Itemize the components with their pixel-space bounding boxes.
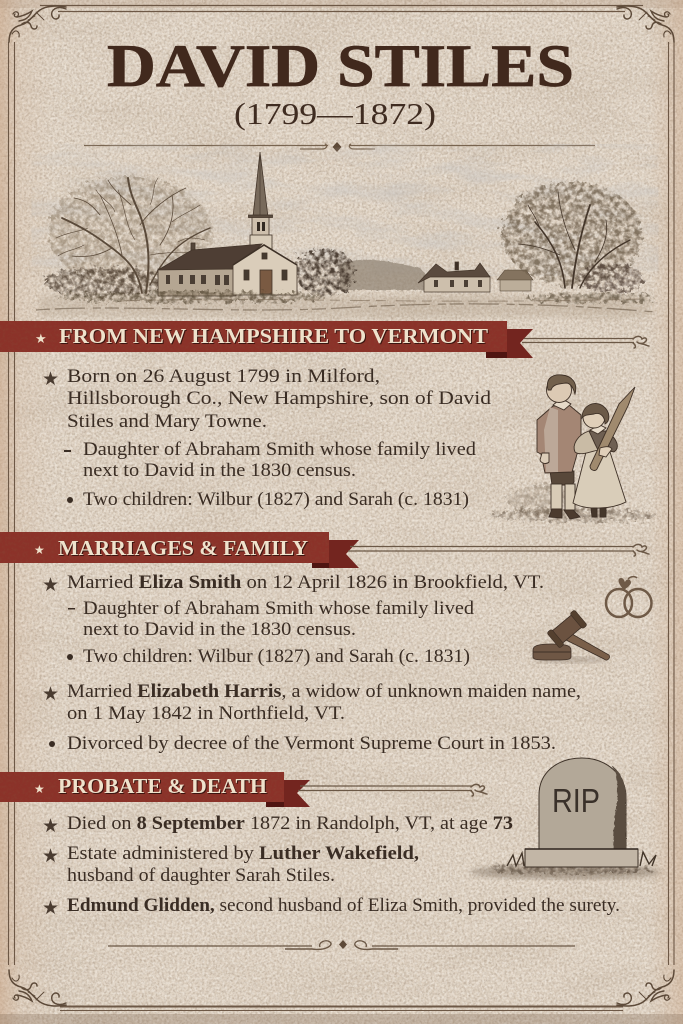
text block: first marriage: Daughter of Abraham Smith whose family lived xyxy=(83,598,475,619)
dash bullet xyxy=(64,450,71,452)
icon: wedding rings xyxy=(606,577,652,617)
corner ornament: top right xyxy=(617,6,674,42)
banner heading: MARRIAGES & FAMILY xyxy=(59,537,309,561)
banner star: ★ xyxy=(35,332,47,347)
text block: first marriage xyxy=(42,572,544,667)
text block: first marriage: next to David in the 1830 census. xyxy=(83,619,356,640)
text block: birth: next to David in the 1830 census. xyxy=(83,460,356,481)
dot bullet xyxy=(67,654,73,660)
ground xyxy=(490,508,660,522)
illustration: village landscape xyxy=(36,150,655,317)
nave windows xyxy=(166,275,229,285)
belfry xyxy=(252,217,269,237)
illustration: two children xyxy=(490,375,660,522)
corner ornament: bottom left xyxy=(9,970,66,1006)
star bullet: ★ xyxy=(42,368,59,390)
dot bullet xyxy=(49,741,55,747)
banner: from New Hampshire to Vermont xyxy=(0,321,533,358)
dash bullet xyxy=(68,608,75,610)
banner heading: FROM NEW HAMPSHIRE TO VERMONT xyxy=(60,325,489,349)
text block: death and estate: Died on 8 September 1872 in Randolph, VT, at age 73 xyxy=(67,813,513,834)
nave wall xyxy=(158,269,236,296)
icon: gavel xyxy=(532,610,610,663)
banner heading: PROBATE & DEATH xyxy=(58,774,267,798)
chimney xyxy=(191,243,195,252)
bottom divider xyxy=(108,940,575,949)
banner heading: MARRIAGES & FAMILY xyxy=(58,536,308,560)
illustration: RIP tombstone xyxy=(470,758,660,879)
star bullet: ★ xyxy=(42,683,59,705)
girl xyxy=(573,403,626,517)
text block: death and estate: Estate administered by Luther Wakefield, xyxy=(67,843,419,864)
stake xyxy=(590,387,635,470)
banner flourish xyxy=(298,784,487,796)
title: DAVID STILES xyxy=(107,33,574,99)
front gable xyxy=(233,245,297,295)
star bullet: ★ xyxy=(42,845,59,867)
stone body xyxy=(539,758,626,849)
banner flourish xyxy=(348,544,649,556)
dot bullet xyxy=(67,497,73,503)
foreground meadow xyxy=(36,291,655,317)
text block: death and estate: husband of daughter Sarah Stiles. xyxy=(67,865,335,886)
text block: second marriage xyxy=(42,681,581,754)
banner flourish xyxy=(522,336,649,348)
spire xyxy=(253,152,268,217)
text block: first marriage: Two children: Wilbur (1827) and Sarah (c. 1831) xyxy=(83,646,470,667)
banner heading: FROM NEW HAMPSHIRE TO VERMONT xyxy=(59,324,488,348)
text block: second marriage: Divorced by decree of the Vermont Supreme Court in 1853. xyxy=(67,733,556,754)
banner star: ★ xyxy=(34,782,45,796)
text block: birth xyxy=(42,366,492,510)
top divider xyxy=(84,142,595,152)
text block: birth: Daughter of Abraham Smith whose family lived xyxy=(83,439,477,460)
text block: birth: Two children: Wilbur (1827) and Sarah (c. 1831) xyxy=(83,489,469,510)
farmhouse xyxy=(418,262,490,292)
text block: second marriage: on 1 May 1842 in Northfield, VT. xyxy=(67,703,345,724)
right tree xyxy=(502,182,644,292)
barn xyxy=(497,270,533,291)
sky clouds xyxy=(60,150,630,270)
banner heading: PROBATE & DEATH xyxy=(59,775,268,799)
stone base xyxy=(525,849,638,867)
text block: first marriage: Married Eliza Smith on 12 April 1826 in Brookfield, VT. xyxy=(67,572,544,593)
banner star: ★ xyxy=(34,543,45,557)
corner ornament: top left xyxy=(9,6,66,42)
roof xyxy=(158,244,262,270)
boy xyxy=(537,375,581,519)
corner ornament: bottom right xyxy=(617,970,674,1006)
grass xyxy=(507,852,656,866)
banner: probate and death xyxy=(0,772,310,807)
text block: second marriage: Married Elizabeth Harris , a widow of unknown maiden name, xyxy=(67,681,581,702)
text block: death and estate xyxy=(42,813,620,919)
star bullet: ★ xyxy=(42,815,59,837)
banner: marriages and family xyxy=(0,532,359,568)
left tree xyxy=(43,177,215,297)
distant hills xyxy=(340,260,440,290)
middle bush xyxy=(295,248,355,296)
text block: birth: Stiles and Mary Towne. xyxy=(67,411,267,432)
RIP inscription: RIP xyxy=(552,782,600,819)
star bullet: ★ xyxy=(42,897,59,919)
text block: death and estate: Edmund Glidden, second husband of Eliza Smith, provided the surety. xyxy=(67,895,620,916)
star bullet: ★ xyxy=(42,574,59,596)
subtitle: life dates: (1799—1872) xyxy=(234,96,436,131)
church xyxy=(158,152,297,296)
text block: birth: Hillsborough Co., New Hampshire, son of David xyxy=(67,388,492,409)
text block: birth: Born on 26 August 1799 in Milford, xyxy=(67,366,380,387)
